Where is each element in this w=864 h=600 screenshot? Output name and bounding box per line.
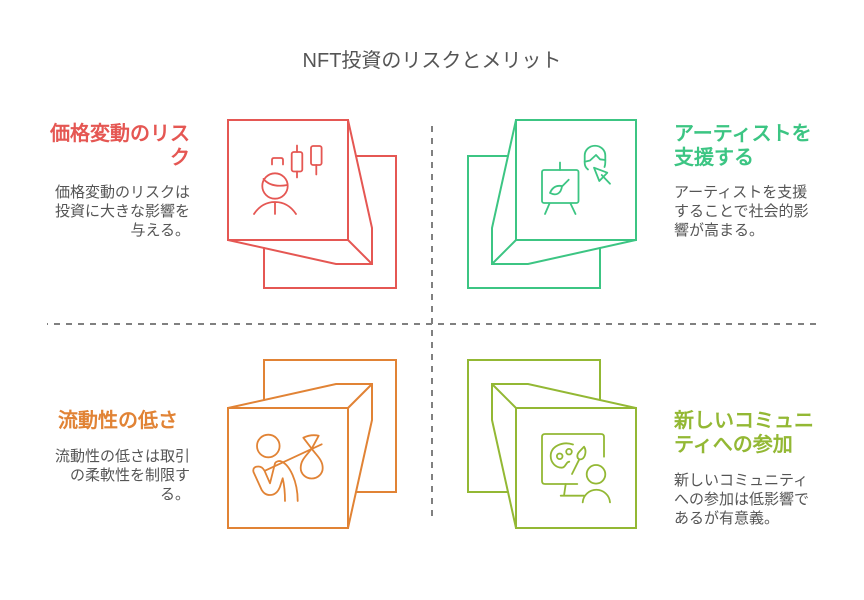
- heading: community: [674, 410, 814, 456]
- text: community: への参加は低影響で: [674, 491, 809, 508]
- heading: community: ティへの参加: [674, 434, 793, 456]
- text: liquidity: る。: [160, 486, 190, 503]
- text: price risk: 与える。: [130, 222, 190, 239]
- heading: price risk: 価格変動のリス: [50, 123, 190, 145]
- heading: support artists: 支援する: [674, 147, 754, 169]
- text: price risk: 投資に大きな影響を: [55, 203, 190, 220]
- text: community: 新しいコミュニティ: [674, 472, 808, 489]
- text: liquidity: 流動性の低さは取引: [55, 448, 190, 465]
- text: liquidity: の柔軟性を制限す: [70, 467, 190, 484]
- text: support artists: 響が高まる。: [674, 222, 764, 239]
- heading: price risk: ク: [170, 147, 190, 169]
- text: price risk: 価格変動のリスクは: [55, 184, 190, 201]
- text: community: あるが有意義。: [674, 510, 779, 527]
- panel: green folded square: [468, 120, 636, 288]
- heading: price risk: [50, 122, 190, 169]
- panel: lime folded square: [468, 360, 636, 528]
- title: NFT投資のリスクとメリット: [303, 50, 561, 72]
- quadrant dividers: [47, 126, 816, 522]
- icon: investor with candlesticks: [254, 146, 322, 214]
- text: price risk: [55, 184, 190, 239]
- heading: support artists: アーティストを: [674, 123, 812, 145]
- icon: monitor with palette and person: [542, 434, 610, 502]
- text: support artists: アーティストを支援: [674, 184, 807, 201]
- text: community: [674, 472, 809, 527]
- text: support artists: [674, 184, 809, 239]
- panel: orange folded square: [228, 360, 396, 528]
- heading: liquidity: 流動性の低さ: [58, 410, 178, 432]
- text: liquidity: [55, 448, 190, 503]
- panel: red folded square: [228, 120, 396, 288]
- text: support artists: することで社会的影: [674, 203, 809, 220]
- heading: community: 新しいコミュニ: [674, 410, 814, 432]
- icon: person carrying bundle: [253, 435, 323, 501]
- icon: easel and artist: [542, 146, 610, 214]
- heading: support artists: [674, 123, 812, 169]
